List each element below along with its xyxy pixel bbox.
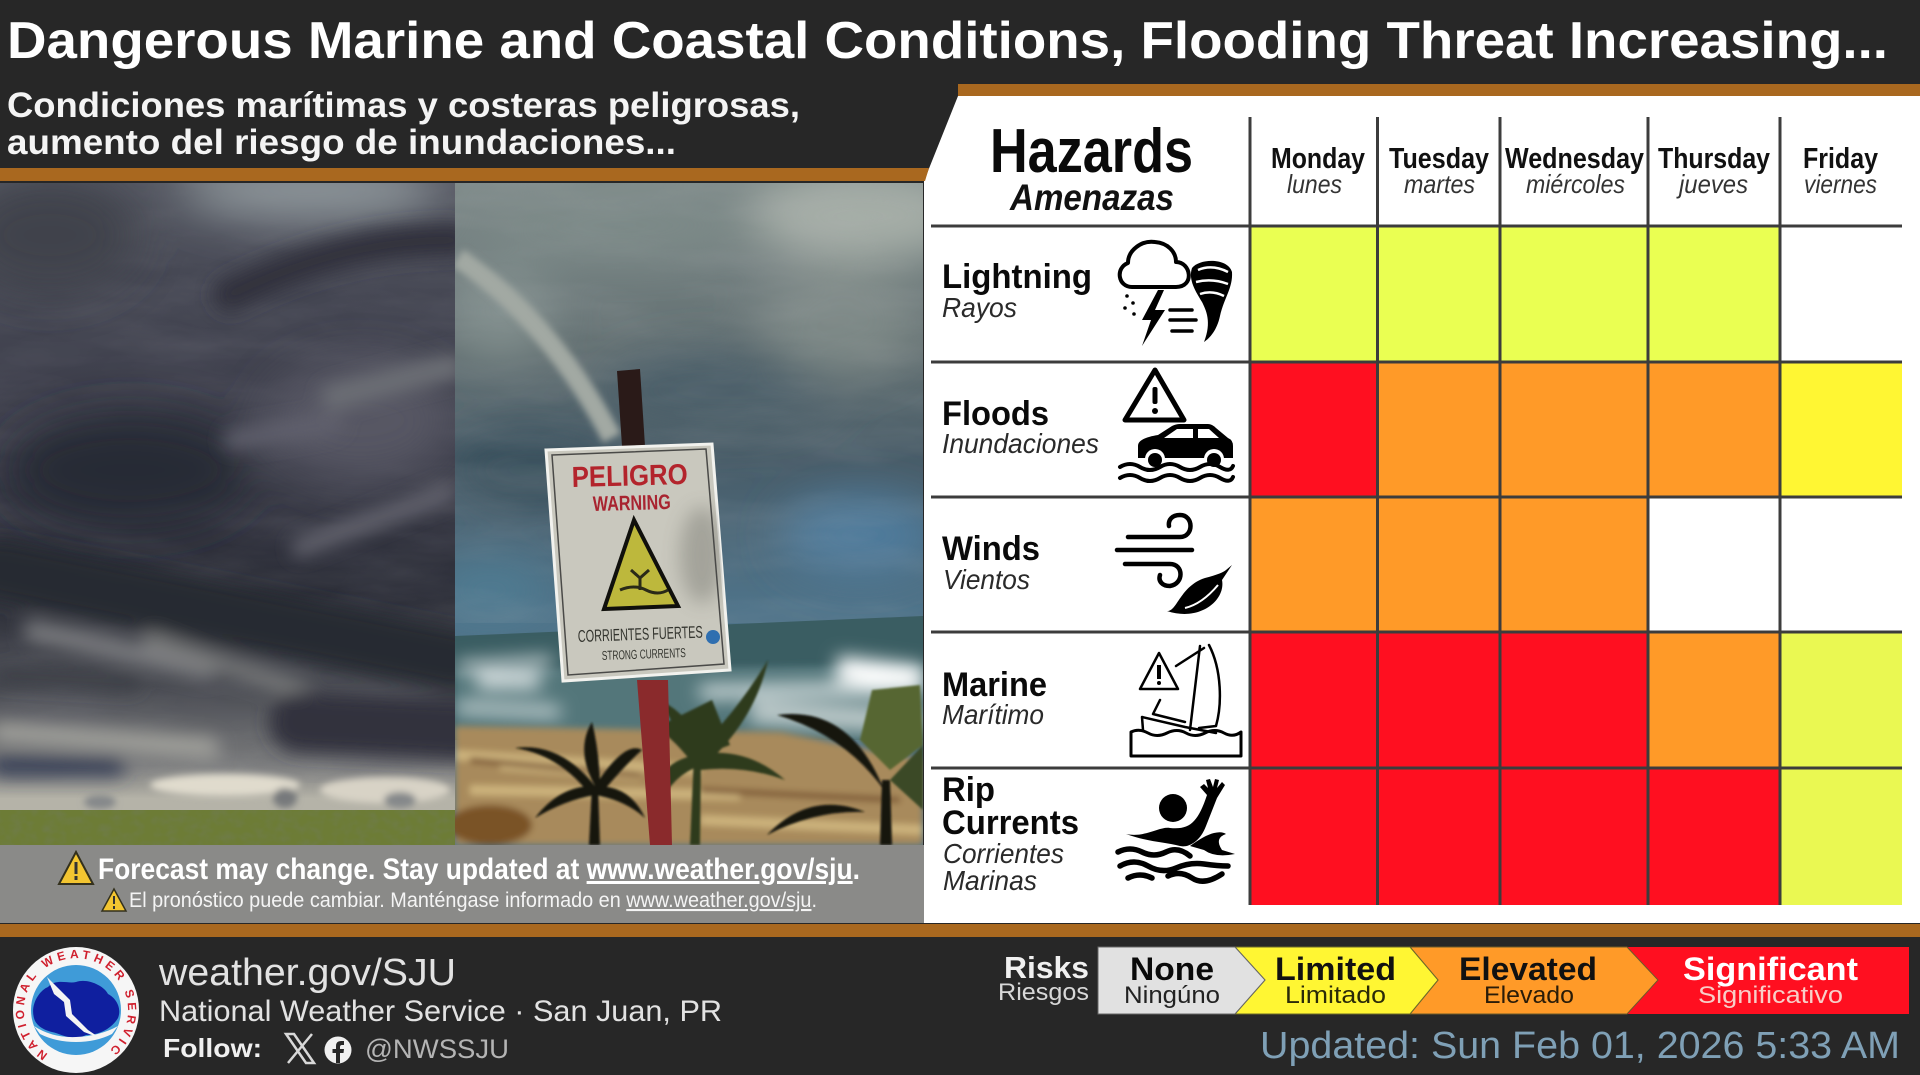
legend: elevated risk [1410, 947, 1658, 1014]
legend: risks label: Risks [1004, 950, 1089, 985]
icon: swimmer in rough water [1118, 779, 1235, 881]
footer text: website and office: National Weather Service · San Juan, PR [159, 995, 722, 1028]
warning sign: CORRIENTES FUERTES [577, 623, 703, 646]
row label: Rip Currents: Currents [942, 804, 1079, 842]
subtitle: Spanish headline: Condiciones marítimas y costeras peligrosas, [7, 86, 800, 125]
row label: Rip Currents [942, 771, 1079, 896]
row label: Rip Currents: Marinas [943, 865, 1037, 896]
column headers: days: Monday [1271, 143, 1365, 175]
legend: no risk [1098, 947, 1265, 1014]
icon: warning triangle large [59, 852, 93, 884]
heading: Hazards: Hazards [990, 117, 1193, 186]
column headers: days: Thursday [1658, 143, 1770, 175]
logo: National Weather Service seal [13, 947, 139, 1073]
legend: significant risk: Significativo [1698, 982, 1843, 1009]
panel: hazards table background [924, 96, 1920, 923]
sea [455, 616, 923, 740]
grid lines [931, 117, 1902, 905]
icon: warning triangle small [102, 889, 126, 911]
row label: Winds: Winds [942, 530, 1040, 568]
column headers: days: martes [1404, 169, 1475, 199]
legend: elevated risk: Elevado [1484, 982, 1574, 1009]
accent bar: lower [0, 924, 1920, 937]
legend: significant risk: Significant [1683, 951, 1858, 987]
legend: no risk: Ningúno [1124, 982, 1220, 1009]
column headers: days: viernes [1804, 169, 1877, 199]
disclaimer text: English: Forecast may change. Stay updated at www.weather.gov/sju. [98, 853, 860, 886]
surf [457, 661, 552, 667]
column headers: days: jueves [1676, 169, 1748, 199]
column headers: days: Friday [1803, 143, 1878, 175]
footer background [0, 937, 1920, 1075]
row label: Floods [942, 395, 1099, 459]
icon: sailboat with warning triangle [1131, 645, 1241, 756]
photo: storm clouds over a field [0, 160, 470, 845]
footer text: website and office: weather.gov/SJU [158, 952, 456, 994]
row label: Marine: Marítimo [942, 699, 1044, 730]
accent bar: upper left [0, 168, 929, 181]
legend: no risk: None [1130, 951, 1214, 987]
footer text: website and office [158, 952, 722, 1028]
icon: X logo [286, 1034, 314, 1063]
timestamp: Updated: Sun Feb 01, 2026 5:33 AM [1260, 1025, 1900, 1067]
subtitle: Spanish headline [7, 86, 800, 162]
warning sign: WARNING [593, 491, 671, 516]
chart: hazard risk grid cells [1250, 226, 1902, 905]
footer text: social handle: @NWSSJU [365, 1034, 509, 1064]
legend: limited risk [1235, 947, 1438, 1014]
heading: Hazards [990, 117, 1193, 218]
disclaimer text: Spanish: El pronóstico puede cambiar. Manténgase informado en www.weather.gov/sju. [129, 889, 817, 912]
warning sign: STRONG CURRENTS [602, 645, 686, 663]
photo: beach warning sign with rainbow [455, 183, 923, 845]
sign post [617, 369, 645, 446]
row label: Marine: Marine [942, 666, 1047, 704]
row label: Marine [942, 666, 1047, 730]
legend: limited risk: Limitado [1285, 982, 1386, 1009]
icon: warning triangle, car and flood water [1120, 370, 1233, 481]
legend: risks label: Riesgos [998, 979, 1089, 1006]
row label: Floods: Inundaciones [942, 428, 1099, 459]
row label: Winds: Vientos [943, 564, 1030, 595]
footer text: follow: Follow: [163, 1033, 262, 1063]
column headers: days: miércoles [1526, 169, 1625, 199]
heading: Hazards: Amenazas [1009, 177, 1174, 218]
legend: risks label [998, 950, 1089, 1006]
row label: Lightning: Lightning [942, 258, 1092, 296]
row label: Lightning: Rayos [942, 292, 1017, 323]
disclaimer strip [0, 845, 924, 923]
accent bar: upper right [958, 84, 1920, 96]
subtitle: Spanish headline: aumento del riesgo de inundaciones... [7, 123, 676, 162]
icon: wind gusts and leaf [1117, 515, 1232, 614]
legend: significant risk [1627, 947, 1909, 1014]
column headers: days: lunes [1287, 169, 1342, 199]
icon: storm cloud, lightning and tornado [1120, 242, 1232, 346]
legend: elevated risk: Elevated [1459, 951, 1597, 987]
row label: Rip Currents: Corrientes [943, 838, 1064, 869]
row label: Floods: Floods [942, 395, 1049, 433]
sand [448, 726, 923, 845]
warning sign [546, 444, 730, 681]
column headers: days: Tuesday [1389, 143, 1489, 175]
icon: Facebook logo [324, 1036, 352, 1064]
row label: Winds [942, 530, 1040, 595]
title: English headline: Dangerous Marine and Coastal Conditions, Flooding Threat Increasing... [7, 12, 1888, 70]
legend: limited risk: Limited [1275, 951, 1396, 987]
column headers: days [1271, 143, 1878, 199]
row label: Rip Currents: Rip [942, 771, 995, 809]
warning sign: PELIGRO [571, 459, 688, 494]
row label: Lightning [942, 258, 1092, 323]
column headers: days: Wednesday [1505, 143, 1644, 175]
grass [0, 810, 455, 845]
rainbow [458, 258, 612, 438]
palm trees [515, 660, 923, 845]
